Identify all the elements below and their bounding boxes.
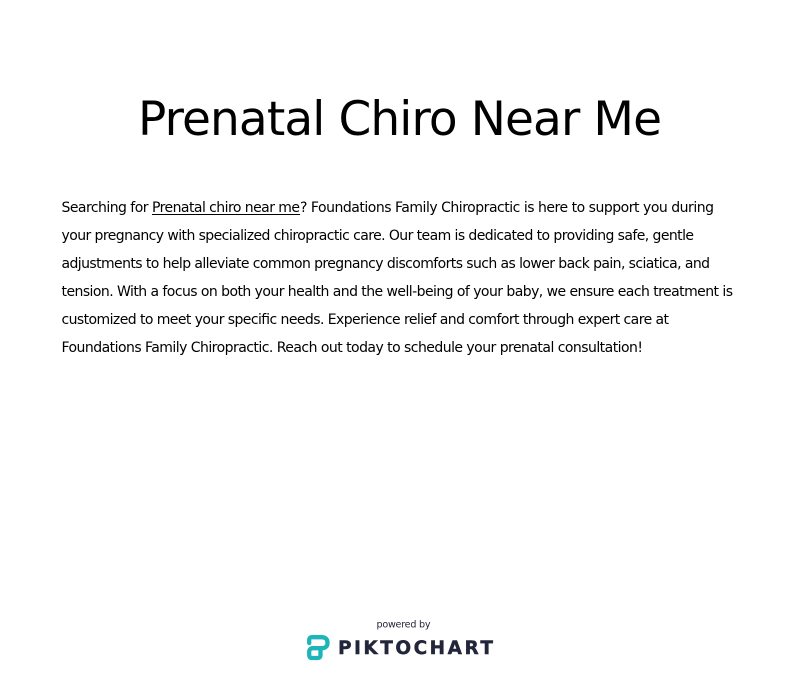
body paragraph: customized to meet your specific needs. Experience relief and comfort through expert care at [62,312,669,328]
body paragraph: Foundations Family Chiropractic. Reach out today to schedule your prenatal consultation! [62,340,643,356]
body paragraph: Prenatal chiro near me [152,200,300,216]
powered by label: powered by [376,620,431,630]
body paragraph: tension. With a focus on both your health and the well-being of your baby, we ensure each treatment is [62,284,733,300]
wordmark: PIKTOCHART [338,638,493,659]
body paragraph: Searching for [62,200,149,216]
powered by Piktochart logo [309,620,493,659]
body paragraph: ? Foundations Family Chiropractic is here to support you during [300,200,714,216]
body paragraph: your pregnancy with specialized chiropractic care. Our team is dedicated to providing safe, gentle [62,228,694,244]
body paragraph: adjustments to help alleviate common pregnancy discomforts such as lower back pain, sciatica, and [62,256,710,272]
icon: Piktochart P mark [309,637,328,658]
title: Prenatal Chiro Near Me [138,92,662,147]
body paragraph [62,200,733,356]
